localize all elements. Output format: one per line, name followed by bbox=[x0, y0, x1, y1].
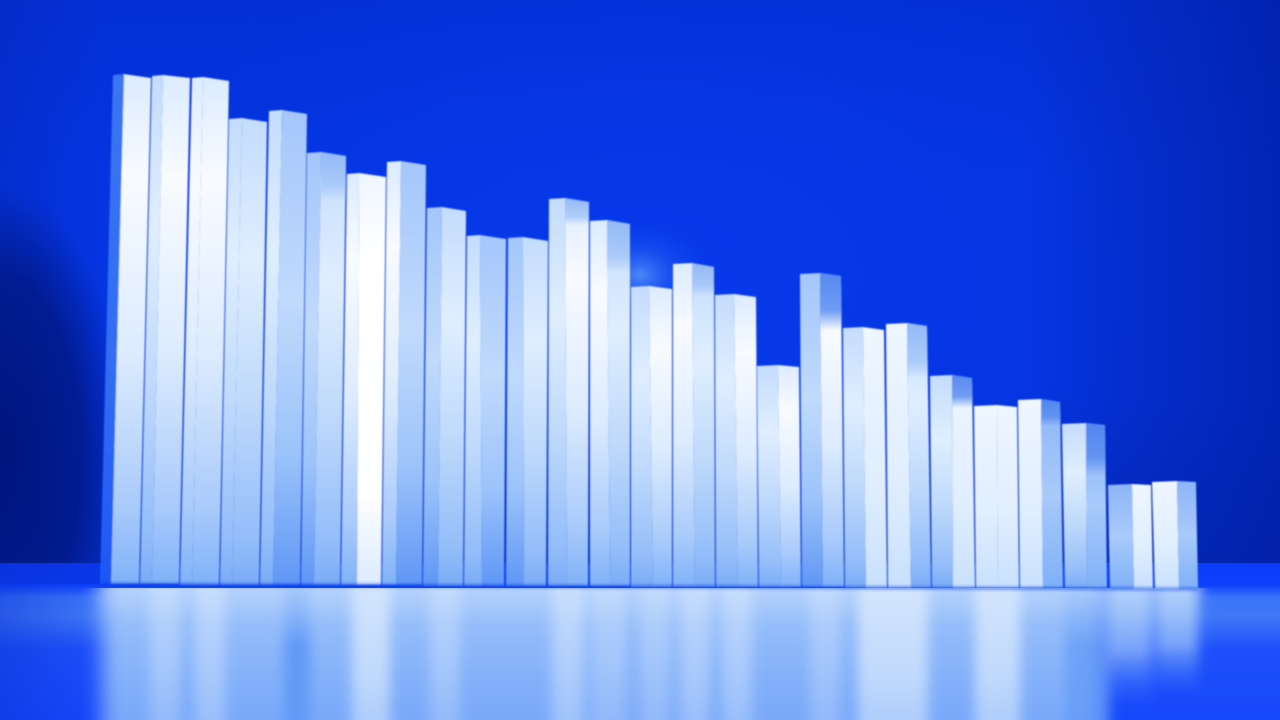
bar 23 bbox=[1018, 399, 1063, 588]
bar 13 bbox=[590, 220, 630, 586]
bar 3 bbox=[180, 77, 229, 585]
bar 25 bbox=[1108, 484, 1153, 589]
bar 22 bbox=[974, 405, 1019, 588]
bar 5 bbox=[260, 110, 307, 585]
bar 15 bbox=[673, 263, 715, 587]
bar 17 bbox=[757, 365, 801, 587]
bar 1 bbox=[100, 74, 151, 584]
bar 18 bbox=[800, 273, 844, 587]
bar 12 bbox=[548, 198, 589, 586]
bar 8 bbox=[382, 161, 426, 585]
reflective floor bbox=[0, 563, 1280, 720]
contact shadow at bar bases bbox=[100, 583, 1198, 590]
bar 9 bbox=[423, 207, 466, 586]
bar 24 bbox=[1062, 423, 1107, 588]
bar 16 bbox=[715, 294, 758, 587]
bar 20 bbox=[886, 323, 931, 588]
bar 14 bbox=[631, 286, 672, 587]
bar 26 bbox=[1152, 481, 1198, 589]
bar 19 bbox=[843, 327, 887, 588]
bars bbox=[100, 74, 1198, 589]
bar 7 bbox=[341, 173, 386, 585]
bar 11 bbox=[506, 237, 548, 586]
bar 10 bbox=[464, 235, 506, 586]
bar 21 bbox=[930, 375, 975, 588]
bar reflections on floor bbox=[102, 580, 1198, 720]
bar 2 bbox=[140, 75, 190, 584]
bar 4 bbox=[220, 118, 267, 585]
bar 6 bbox=[301, 152, 346, 585]
